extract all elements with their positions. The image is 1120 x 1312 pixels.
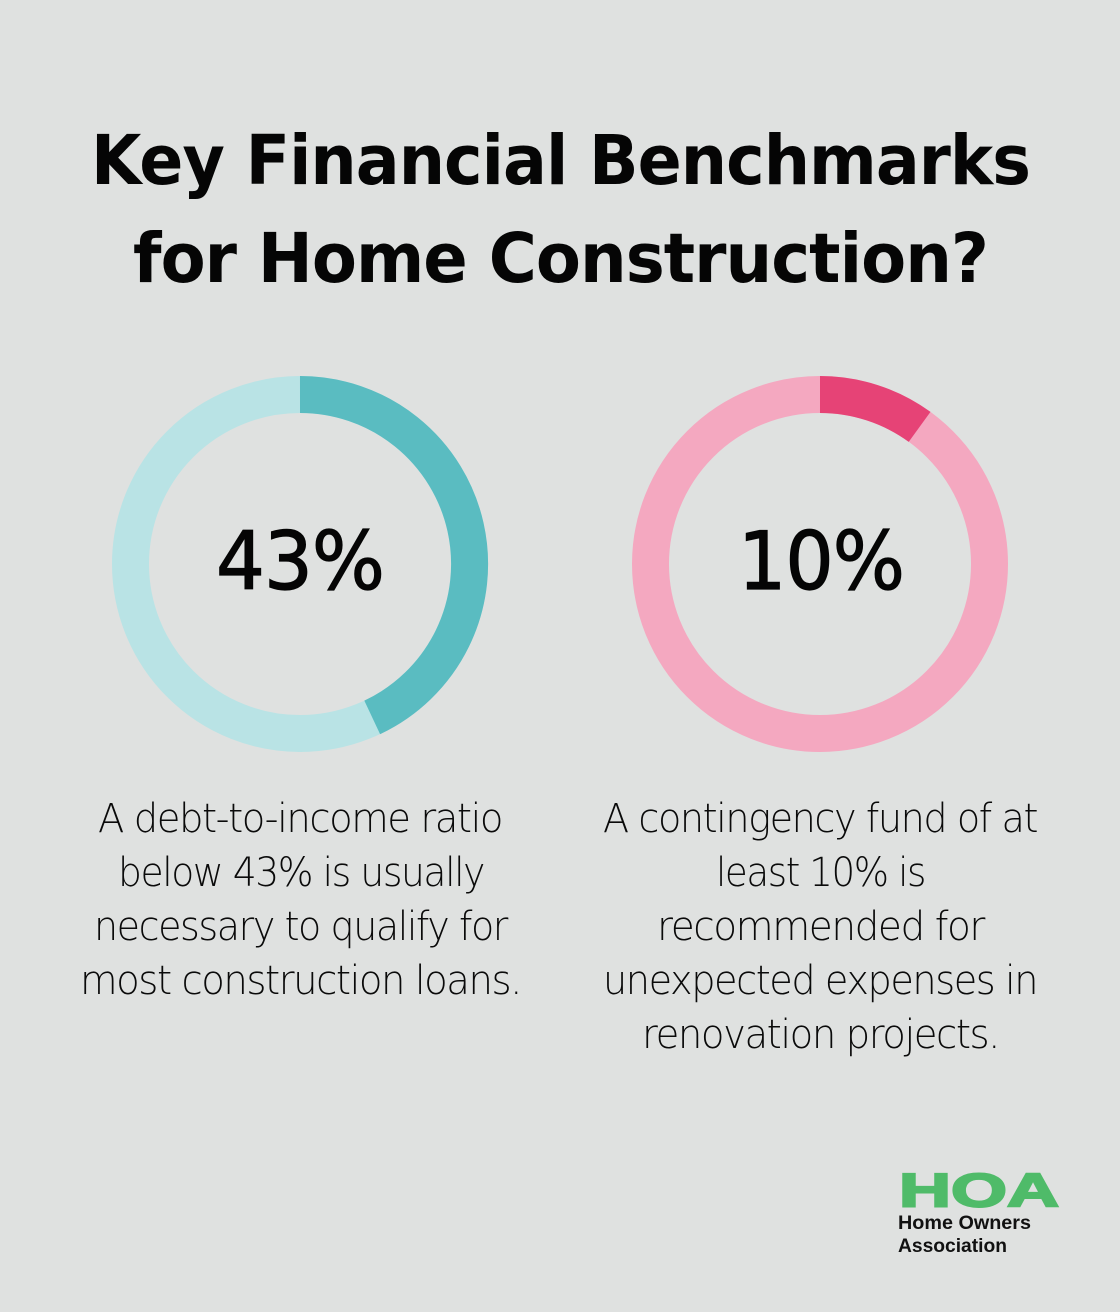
logo: HOA: Home Owners — [898, 1213, 1031, 1234]
donut chart: 43% — [130, 394, 470, 734]
description: contingency fund: A contingency fund of at — [603, 796, 1037, 842]
stat: 10%: 10% — [738, 515, 904, 608]
title: for Home Construction? — [133, 219, 988, 299]
description: contingency fund — [603, 796, 1037, 1058]
description: contingency fund: recommended for — [657, 904, 986, 950]
description: contingency fund: unexpected expenses in — [603, 958, 1037, 1004]
description: debt-to-income — [80, 796, 521, 1004]
description: debt-to-income: below 43% is usually — [118, 850, 484, 896]
description: debt-to-income: A debt-to-income ratio — [98, 796, 502, 842]
logo: HOA — [898, 1164, 1059, 1257]
title: Key Financial Benchmarks — [91, 121, 1030, 201]
logo: HOA: Association — [898, 1236, 1007, 1257]
panel: debt-to-income ratio — [80, 394, 521, 1004]
description: contingency fund: least 10% is — [716, 850, 925, 896]
description: contingency fund: renovation projects. — [642, 1012, 999, 1058]
stat: 43%: 43% — [216, 515, 384, 608]
donut chart: 10% — [650, 394, 990, 734]
description: debt-to-income: most construction loans. — [80, 958, 521, 1004]
description: debt-to-income: necessary to qualify for — [94, 904, 509, 950]
panel: contingency fund — [603, 394, 1037, 1058]
title — [91, 121, 1030, 299]
logo: HOA: HOA — [899, 1164, 1059, 1216]
